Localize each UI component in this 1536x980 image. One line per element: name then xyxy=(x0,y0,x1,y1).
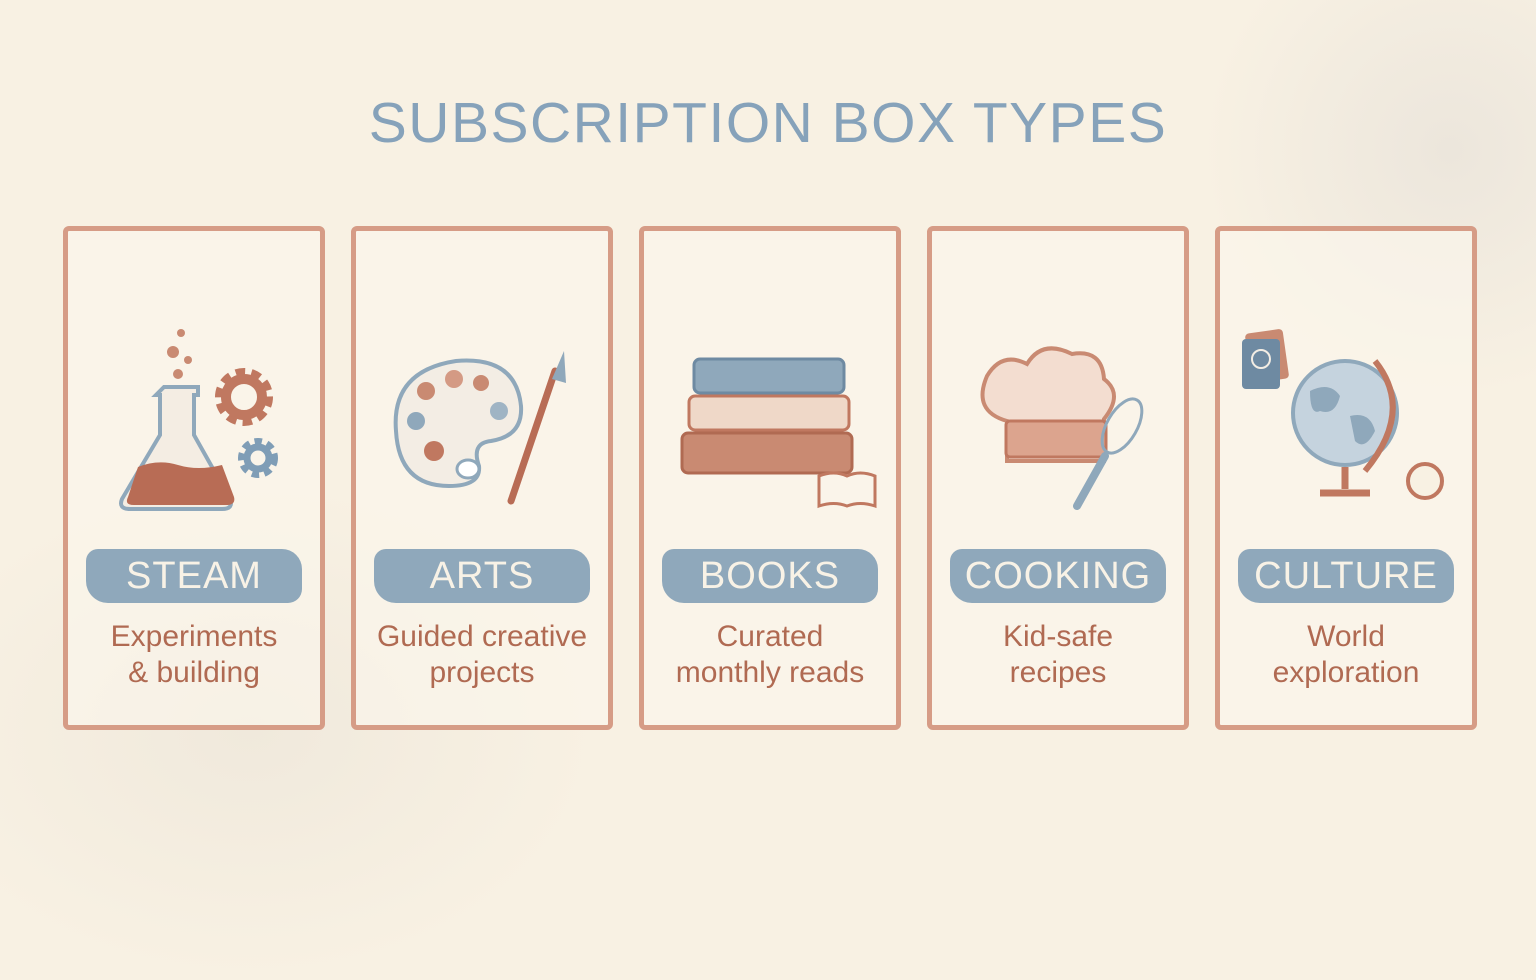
icon: book stack xyxy=(680,358,876,508)
description: Experiments xyxy=(111,620,277,653)
icon: palette and brush xyxy=(394,351,566,504)
description: Guided creative xyxy=(377,620,587,653)
icon: chef hat and whisk xyxy=(980,346,1144,510)
label: ARTS xyxy=(374,549,590,603)
panel: steam xyxy=(63,226,325,730)
description: Kid-safe xyxy=(1003,620,1113,653)
label: BOOKS xyxy=(662,549,878,603)
panel: arts xyxy=(351,226,613,730)
description xyxy=(1273,620,1419,689)
label: CULTURE: CULTURE xyxy=(1254,555,1438,597)
title: SUBSCRIPTION BOX TYPES xyxy=(369,91,1167,155)
label: CULTURE xyxy=(1238,549,1454,603)
description: Curated xyxy=(717,620,823,653)
panel: books xyxy=(639,226,901,730)
description: exploration xyxy=(1273,656,1419,689)
icon: globe passport compass xyxy=(1242,329,1444,500)
label: STEAM: STEAM xyxy=(126,555,262,597)
description: & building xyxy=(128,656,260,689)
description: World xyxy=(1307,620,1385,653)
description: recipes xyxy=(1010,656,1106,689)
panel: culture xyxy=(1215,226,1477,730)
description xyxy=(111,620,277,689)
label: STEAM xyxy=(86,549,302,603)
label: COOKING: COOKING xyxy=(965,555,1151,597)
panel: cooking xyxy=(927,226,1189,730)
description: monthly reads xyxy=(676,656,864,689)
label: ARTS: ARTS xyxy=(430,555,534,597)
label: COOKING xyxy=(950,549,1166,603)
description xyxy=(1003,620,1113,689)
label: BOOKS: BOOKS xyxy=(700,555,840,597)
description: projects xyxy=(429,656,535,689)
icon: flask and gears xyxy=(119,329,278,511)
description xyxy=(377,620,587,689)
description xyxy=(676,620,864,689)
